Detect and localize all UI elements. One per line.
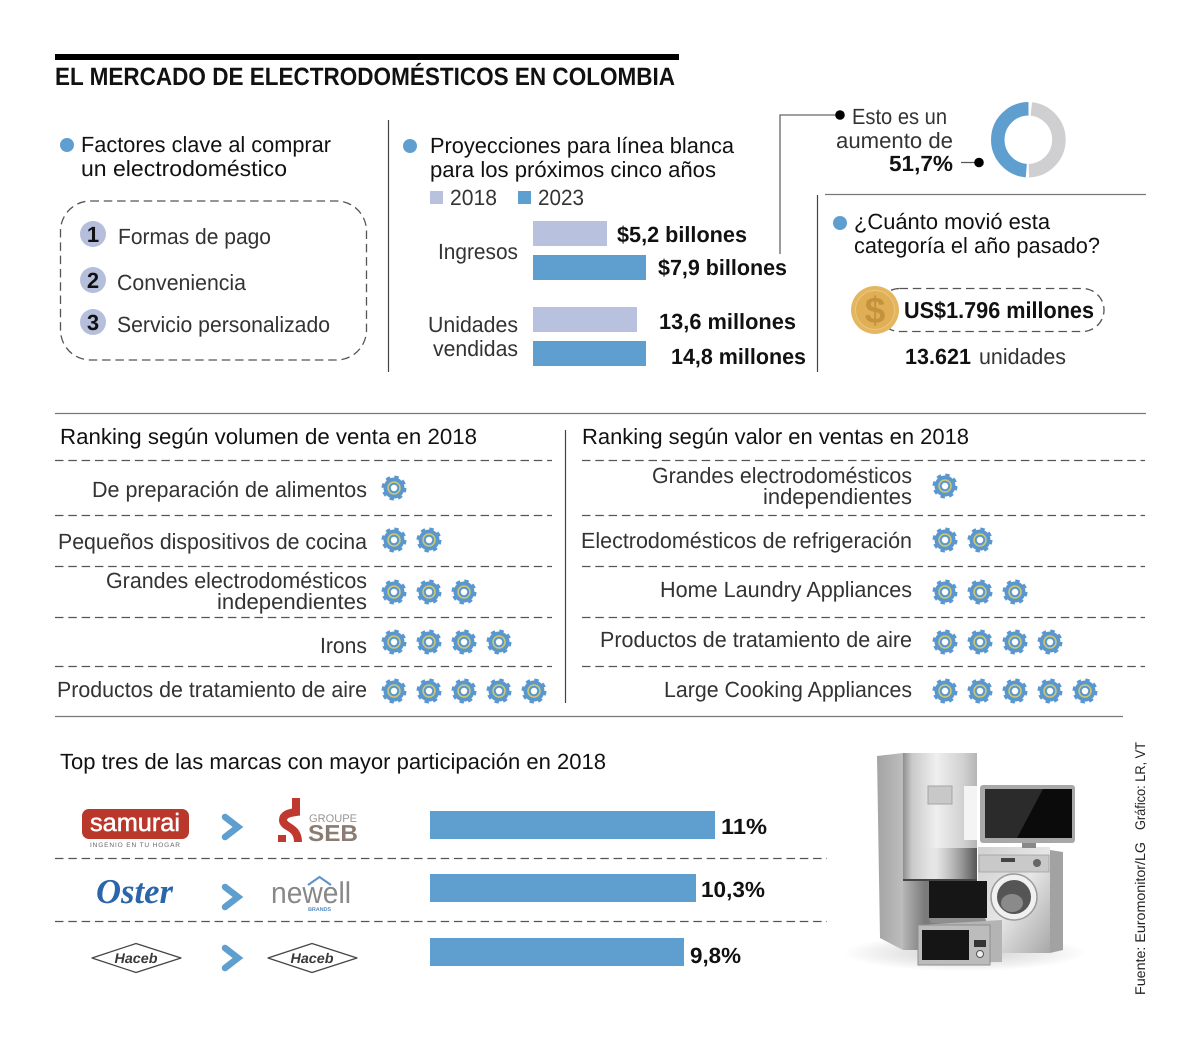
heading: key factors: un electrodoméstico <box>81 156 287 181</box>
row: large appliances: independientes <box>217 589 367 614</box>
icon: dollar coin <box>851 286 899 334</box>
microwave <box>918 920 1002 965</box>
factor 1: 1 <box>87 222 99 247</box>
row: large cooking <box>664 677 1096 702</box>
row: air treatment <box>57 677 545 702</box>
factor 1: Formas de pago <box>118 224 271 249</box>
row: air treatment: Productos de tratamiento de aire <box>600 627 912 652</box>
fridge <box>877 753 977 950</box>
factor 2: 2 <box>87 268 99 293</box>
logo: Oster: Oster <box>96 872 173 911</box>
bar chart: revenue: $5,2 billones <box>617 222 747 247</box>
heading: projections <box>403 133 735 182</box>
bar chart: revenue: $7,9 billones <box>658 255 787 280</box>
laptop <box>929 881 987 923</box>
units text: unidades <box>979 344 1066 369</box>
logo: Samurai: samurai <box>90 809 180 837</box>
units text: 13.621 <box>905 344 971 369</box>
row: food preparation: De preparación de alimentos <box>92 477 367 502</box>
heading: projections: para los próximos cinco años <box>430 157 716 182</box>
bar chart: units sold: 13,6 millones <box>659 309 796 334</box>
panel: projections <box>403 133 806 369</box>
logo: Haceb left: Haceb <box>114 950 158 966</box>
bar: 10,3% <box>430 874 765 902</box>
row: irons <box>320 631 510 658</box>
logo: Newell: newell <box>271 877 351 910</box>
callout text <box>836 104 984 176</box>
arrow 2 <box>225 887 238 907</box>
heading: last year: categoría el año pasado? <box>854 233 1100 258</box>
washing machine <box>978 847 1063 953</box>
bar chart: units sold <box>428 307 806 369</box>
row: large appliances: Grandes electrodomésticos <box>652 463 912 488</box>
heading: projections: Proyecciones para línea blanca <box>430 133 735 158</box>
logo: Samurai: INGENIO EN TU HOGAR <box>90 842 180 849</box>
heading: key factors: Factores clave al comprar <box>81 132 331 157</box>
row: large appliances: independientes <box>763 484 912 509</box>
heading: volume ranking: Ranking según volumen de venta en 2018 <box>60 424 477 449</box>
bar: 10,3%: 10,3% <box>701 877 765 902</box>
bar chart: revenue <box>438 221 787 280</box>
panel: key factors <box>60 132 366 360</box>
callout: 51,7% increase <box>780 104 1059 254</box>
donut chart <box>998 109 1059 171</box>
logo: Haceb left <box>92 944 181 972</box>
row: home laundry: Home Laundry Appliances <box>660 577 912 602</box>
factor 2 <box>80 267 247 295</box>
bar chart: units sold: 14,8 millones <box>671 344 806 369</box>
source credit <box>1132 742 1148 995</box>
bar: 9,8% <box>430 938 741 968</box>
factor 1 <box>80 221 271 249</box>
bar: 11% <box>430 811 767 839</box>
row: large appliances <box>106 568 475 614</box>
panel: ranking by value <box>581 424 1145 702</box>
row: air treatment: Productos de tratamiento de aire <box>57 677 367 702</box>
panel: ranking by volume <box>55 424 552 702</box>
arrow 1 <box>225 817 238 837</box>
row: large appliances: Grandes electrodomésticos <box>106 568 367 593</box>
row: air treatment <box>600 627 1061 653</box>
icon: dollar coin: $ <box>865 290 886 331</box>
connector arrow <box>780 110 845 254</box>
callout text: Esto es un <box>852 104 947 129</box>
legend: 2023 <box>538 185 584 210</box>
bar: 9,8%: 9,8% <box>690 943 741 968</box>
source credit: Gráfico: LR, VT <box>1132 742 1148 830</box>
row: small kitchen devices: Pequeños dispositivos de cocina <box>58 529 368 554</box>
logo: Samurai <box>82 809 189 849</box>
callout text: aumento de <box>836 128 953 153</box>
logo: Groupe SEB: SEB <box>308 820 358 846</box>
bar chart: revenue: Ingresos <box>438 239 518 264</box>
illustration: appliances <box>843 753 1087 971</box>
heading: value ranking: Ranking según valor en ventas en 2018 <box>582 424 969 449</box>
row: large appliances <box>652 463 956 509</box>
legend <box>430 185 584 210</box>
bar chart: units sold: vendidas <box>433 336 518 361</box>
logo: Haceb right: Haceb <box>290 950 334 966</box>
units text <box>905 344 1066 369</box>
value text: US$1.796 millones <box>904 297 1094 323</box>
heading: top brands: Top tres de las marcas con mayor participación en 2018 <box>60 749 606 774</box>
row: irons: Irons <box>320 633 367 658</box>
bar: 11%: 11% <box>721 814 767 839</box>
logo: Groupe SEB: GROUPE <box>309 813 357 825</box>
factor 3: 3 <box>87 310 99 335</box>
callout text: 51,7% <box>889 151 953 176</box>
logo: Groupe SEB <box>278 798 358 846</box>
bar chart: units sold: Unidades <box>428 312 518 337</box>
dashed factor box <box>60 201 366 360</box>
row: refrigeration: Electrodomésticos de refrigeración <box>581 528 912 553</box>
factor 2: Conveniencia <box>117 270 247 295</box>
arrow 3 <box>225 948 238 968</box>
television <box>980 785 1075 848</box>
heading: last year: ¿Cuánto movió esta <box>854 209 1051 234</box>
row: large cooking: Large Cooking Appliances <box>664 677 912 702</box>
factor 3: Servicio personalizado <box>117 312 330 337</box>
dashed value pill <box>878 288 1104 332</box>
panel: top three brands <box>55 749 827 972</box>
logo: Newell: BRANDS <box>308 907 331 913</box>
source credit: Fuente: Euromonitor/LG <box>1132 842 1148 995</box>
logo: Haceb right <box>268 944 357 972</box>
row: home laundry <box>660 577 1026 603</box>
title: EL MERCADO DE ELECTRODOMÉSTICOS EN COLOMBIA <box>55 62 675 91</box>
heading: key factors <box>60 132 331 181</box>
legend: 2018 <box>450 185 497 210</box>
panel: last year <box>818 194 1146 372</box>
heading: last year <box>833 209 1100 258</box>
